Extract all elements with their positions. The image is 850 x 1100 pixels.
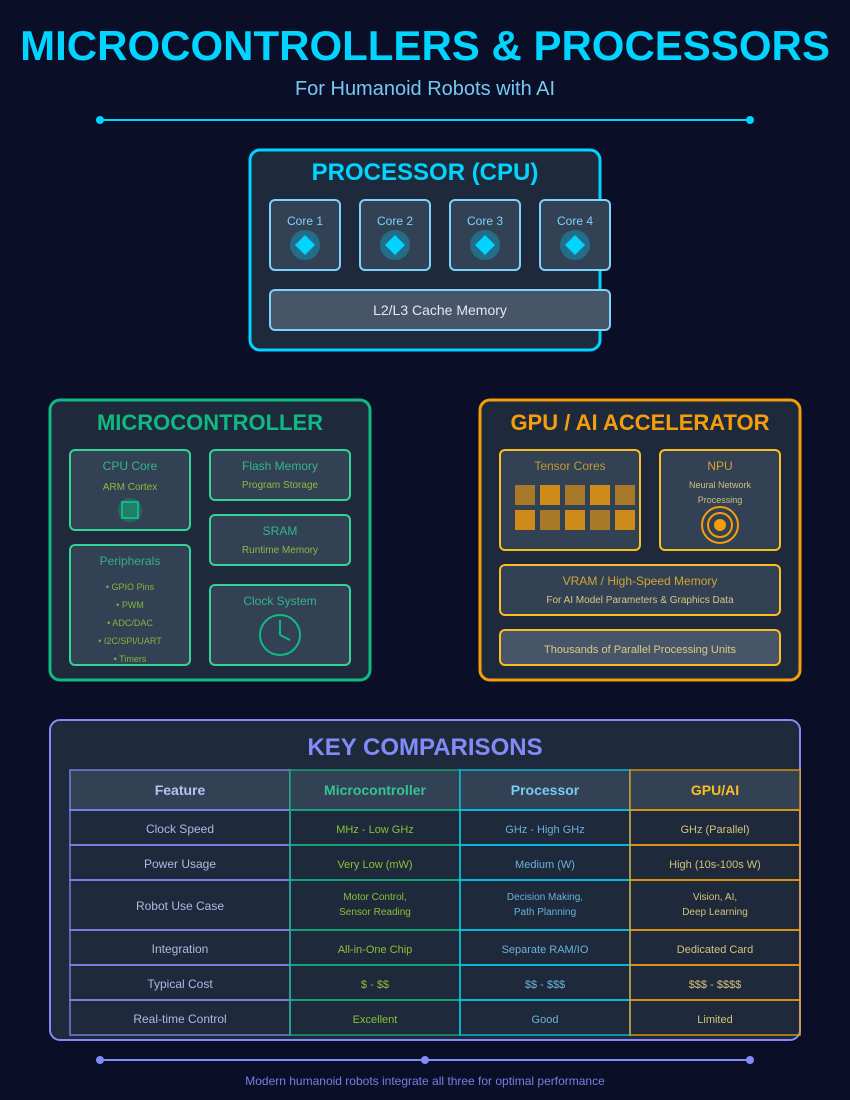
clock system block: [210, 585, 350, 665]
column: processor: [460, 770, 630, 1035]
NPU block: Processing: [698, 495, 742, 505]
VRAM block: For AI Model Parameters & Graphics Data: [546, 595, 734, 606]
microcontroller values: Excellent: [353, 1014, 397, 1026]
feature names: Clock Speed: [146, 822, 214, 836]
core 3: [450, 200, 520, 270]
panel: key comparisons: [50, 720, 800, 1040]
microcontroller values: MHz - Low GHz: [336, 824, 414, 836]
core 1: Core 1: [287, 214, 323, 228]
panel: processor CPU: [250, 150, 610, 350]
flash memory block: Flash Memory: [242, 459, 318, 473]
NPU block: Neural Network: [689, 480, 752, 490]
title: MICROCONTROLLERS & PROCESSORS: [20, 22, 830, 69]
heading: microcontroller: MICROCONTROLLER: [97, 410, 323, 435]
processor values: Separate RAM/IO: [502, 944, 589, 956]
panel: microcontroller: [50, 400, 370, 680]
heading: GPU: GPU / AI ACCELERATOR: [510, 410, 770, 435]
cache memory bar: L2/L3 Cache Memory: [373, 302, 507, 318]
microcontroller values: Very Low (mW): [337, 859, 413, 871]
GPU values: Dedicated Card: [677, 944, 753, 956]
core 1: [270, 200, 340, 270]
comparison table: [70, 770, 800, 1035]
microcontroller values: All-in-One Chip: [338, 944, 412, 956]
microcontroller values: $ - $$: [361, 979, 389, 991]
clock system block: Clock System: [243, 594, 317, 608]
SRAM block: Runtime Memory: [242, 545, 318, 556]
flash memory block: Program Storage: [242, 480, 319, 491]
core 2: Core 2: [377, 214, 413, 228]
peripherals block: • Timers: [114, 654, 147, 664]
GPU values: GHz (Parallel): [680, 824, 750, 836]
flash memory block: [210, 450, 350, 500]
parallel units bar: [500, 630, 780, 665]
cache memory bar: [270, 290, 610, 330]
peripherals block: • PWM: [116, 600, 144, 610]
processor values: [502, 824, 589, 1026]
footer divider: [96, 1056, 754, 1064]
microcontroller values: Sensor Reading: [339, 907, 411, 918]
table header labels: Microcontroller: [324, 782, 427, 798]
tensor cores block: [500, 450, 640, 550]
heading: key comparisons: KEY COMPARISONS: [307, 734, 543, 761]
column: GPU/AI: [630, 770, 800, 1035]
header divider: [96, 116, 754, 124]
processor values: Medium (W): [515, 859, 575, 871]
CPU core block: [70, 450, 190, 530]
microcontroller values: [336, 824, 414, 1026]
icon: concentric target: [702, 507, 738, 543]
GPU values: Limited: [697, 1014, 733, 1026]
parallel units bar: Thousands of Parallel Processing Units: [544, 644, 736, 656]
icon: clock: [260, 615, 300, 655]
core 2: [360, 200, 430, 270]
GPU values: $$$ - $$$$: [689, 979, 741, 991]
peripherals block: Peripherals: [100, 554, 160, 568]
footer note: Modern humanoid robots integrate all three for optimal performance: [245, 1074, 605, 1088]
column: microcontroller: [290, 770, 460, 1035]
core 4: Core 4: [557, 214, 593, 228]
peripherals block: • I2C/SPI/UART: [98, 636, 162, 646]
feature names: Integration: [152, 942, 208, 956]
peripherals block: [70, 545, 190, 665]
GPU values: Deep Learning: [682, 907, 748, 918]
processor values: GHz - High GHz: [505, 824, 585, 836]
processor values: Good: [532, 1014, 558, 1026]
feature names: Power Usage: [144, 857, 216, 871]
core 3: Core 3: [467, 214, 503, 228]
GPU values: [669, 824, 761, 1026]
feature names: Robot Use Case: [136, 899, 224, 913]
feature names: Real-time Control: [133, 1012, 227, 1026]
CPU core block: ARM Cortex: [103, 482, 157, 493]
GPU values: High (10s-100s W): [669, 859, 761, 871]
table header labels: Feature: [155, 782, 205, 798]
subtitle: For Humanoid Robots with AI: [295, 78, 555, 100]
feature names: [133, 822, 227, 1026]
table header labels: [155, 782, 739, 798]
core 4: [540, 200, 610, 270]
tensor cores block: Tensor Cores: [534, 459, 606, 473]
heading: processor: PROCESSOR (CPU): [312, 159, 538, 186]
GPU values: Vision, AI,: [693, 892, 737, 903]
peripherals block: • ADC/DAC: [107, 618, 153, 628]
feature names: Typical Cost: [147, 977, 213, 991]
panel: GPU / AI accelerator: [480, 400, 800, 680]
VRAM block: VRAM / High-Speed Memory: [563, 574, 717, 588]
processor values: Path Planning: [514, 907, 576, 918]
table header labels: GPU/AI: [691, 782, 739, 798]
microcontroller values: Motor Control,: [343, 892, 407, 903]
SRAM block: SRAM: [263, 524, 297, 538]
processor values: $$ - $$$: [525, 979, 565, 991]
column: feature: [70, 770, 290, 1035]
processor values: Decision Making,: [507, 892, 583, 903]
peripherals block: • GPIO Pins: [106, 582, 155, 592]
NPU block: [660, 450, 780, 550]
VRAM block: [500, 565, 780, 615]
table header labels: Processor: [511, 782, 580, 798]
NPU block: NPU: [707, 459, 733, 473]
SRAM block: [210, 515, 350, 565]
CPU core block: CPU Core: [103, 459, 158, 473]
